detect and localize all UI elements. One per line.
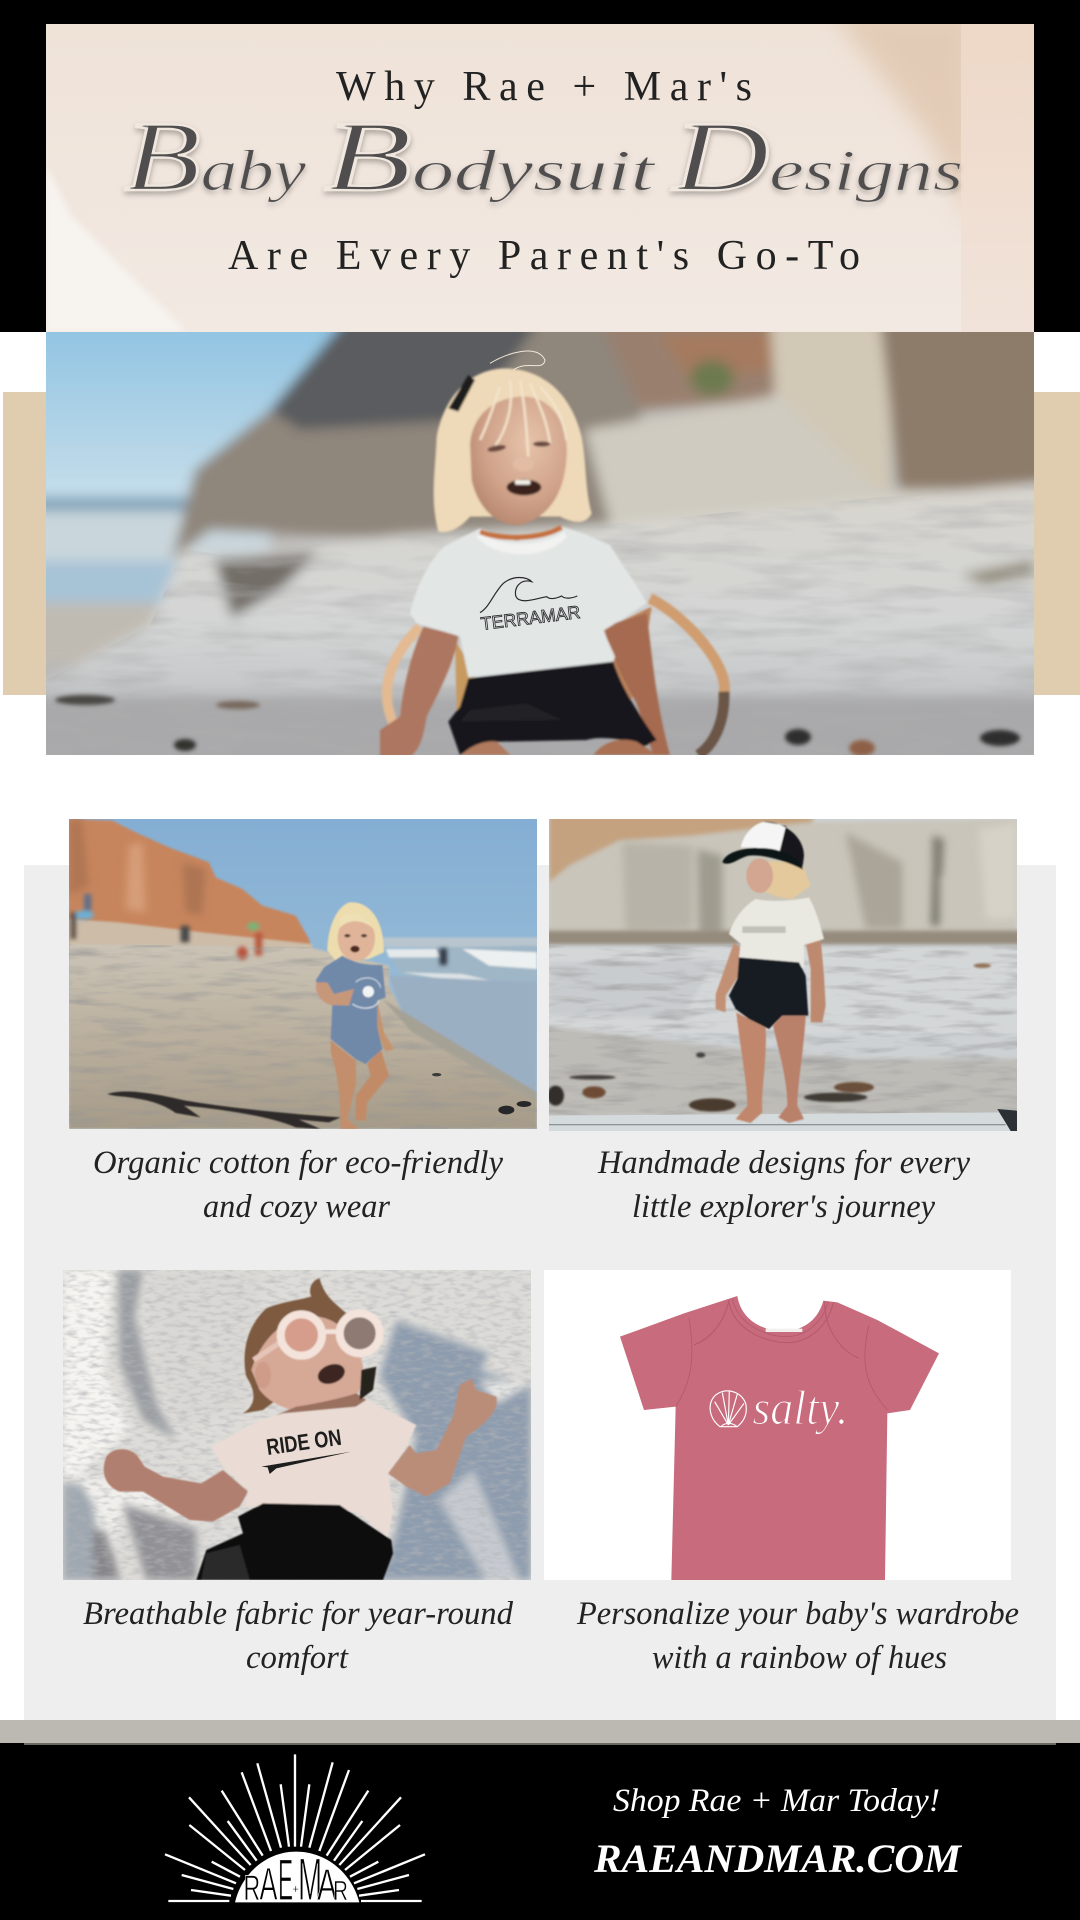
caption: handmade designs: Handmade designs for every [597,1145,970,1181]
panel: grey benefits background [24,865,1056,1720]
footer call to action: RAEANDMAR.COM [593,1836,962,1881]
rock and sand texture [58,497,1034,692]
caption: organic cotton [93,1145,503,1225]
photo 4: pink salty bodysuit [544,1270,1011,1580]
footer black band [0,1743,1080,1920]
knitted blanket texture [63,1270,531,1580]
heading line 1: Why Rae + Mar's [336,64,752,110]
logo: Rae + Mar sunburst: M [298,1845,322,1913]
caption: personalize: with a rainbow of hues [652,1640,947,1676]
script title [122,123,961,208]
caption: organic cotton: Organic cotton for eco-friendly [93,1145,503,1181]
footer call to action: Shop Rae + Mar Today! [613,1783,940,1819]
print: ride on: RIDE ON [265,1424,343,1460]
photo 3: baby with sunglasses on blanket [63,1270,531,1580]
hero photo: laughing toddler on beach [30,320,1050,775]
logo: Rae + Mar sunburst: R [333,1876,348,1907]
panel: header with title [46,10,1034,332]
caption: breathable fabric: comfort [246,1640,349,1676]
caption: breathable fabric: Breathable fabric for year-round [83,1596,513,1632]
photo 1: toddler walking on beach [69,819,539,1129]
logo: Rae + Mar sunburst: A [260,1859,278,1910]
baby figure [104,1278,497,1580]
shadow of child [107,1092,341,1129]
caption: personalize [576,1596,1019,1676]
caption: organic cotton: and cozy wear [203,1189,390,1225]
sand texture [549,945,1017,1115]
script title: D esigns [670,101,963,212]
taupe divider band [0,1720,1080,1743]
beige strip left [3,392,46,695]
caption: handmade designs [597,1145,970,1225]
print: shell and word salty: salty. [752,1382,848,1435]
shirt graphic wave and text: TERRAMAR [480,602,581,634]
logo: Rae + Mar sunburst: + [292,1884,299,1896]
print: shell and word salty [710,1390,844,1434]
beige strip right [1034,392,1080,695]
photo 2: toddler in cap by the rocks [546,816,1022,1131]
footer call to action [593,1783,962,1881]
caption: personalize: Personalize your baby's wardrobe [576,1596,1019,1632]
sand texture [69,944,537,1129]
child figure [716,822,826,1123]
caption: breathable fabric [83,1596,513,1676]
heading line 3: Are Every Parent's Go-To [228,233,860,279]
shirt graphic wave and text [480,577,581,634]
top black band [0,0,1080,332]
logo: Rae + Mar sunburst: A [317,1860,337,1911]
script title: B odysuit [324,101,657,212]
print: ride on [262,1429,351,1474]
script title: B aby [124,101,306,212]
child figure with chair [380,351,725,757]
child figure [316,902,394,1129]
caption: handmade designs: little explorer's journey [632,1189,935,1225]
logo: Rae + Mar sunburst: R [244,1869,260,1908]
logo: Rae + Mar sunburst [165,1754,425,1913]
board [549,1112,1011,1131]
logo: Rae + Mar sunburst: E [278,1849,293,1913]
